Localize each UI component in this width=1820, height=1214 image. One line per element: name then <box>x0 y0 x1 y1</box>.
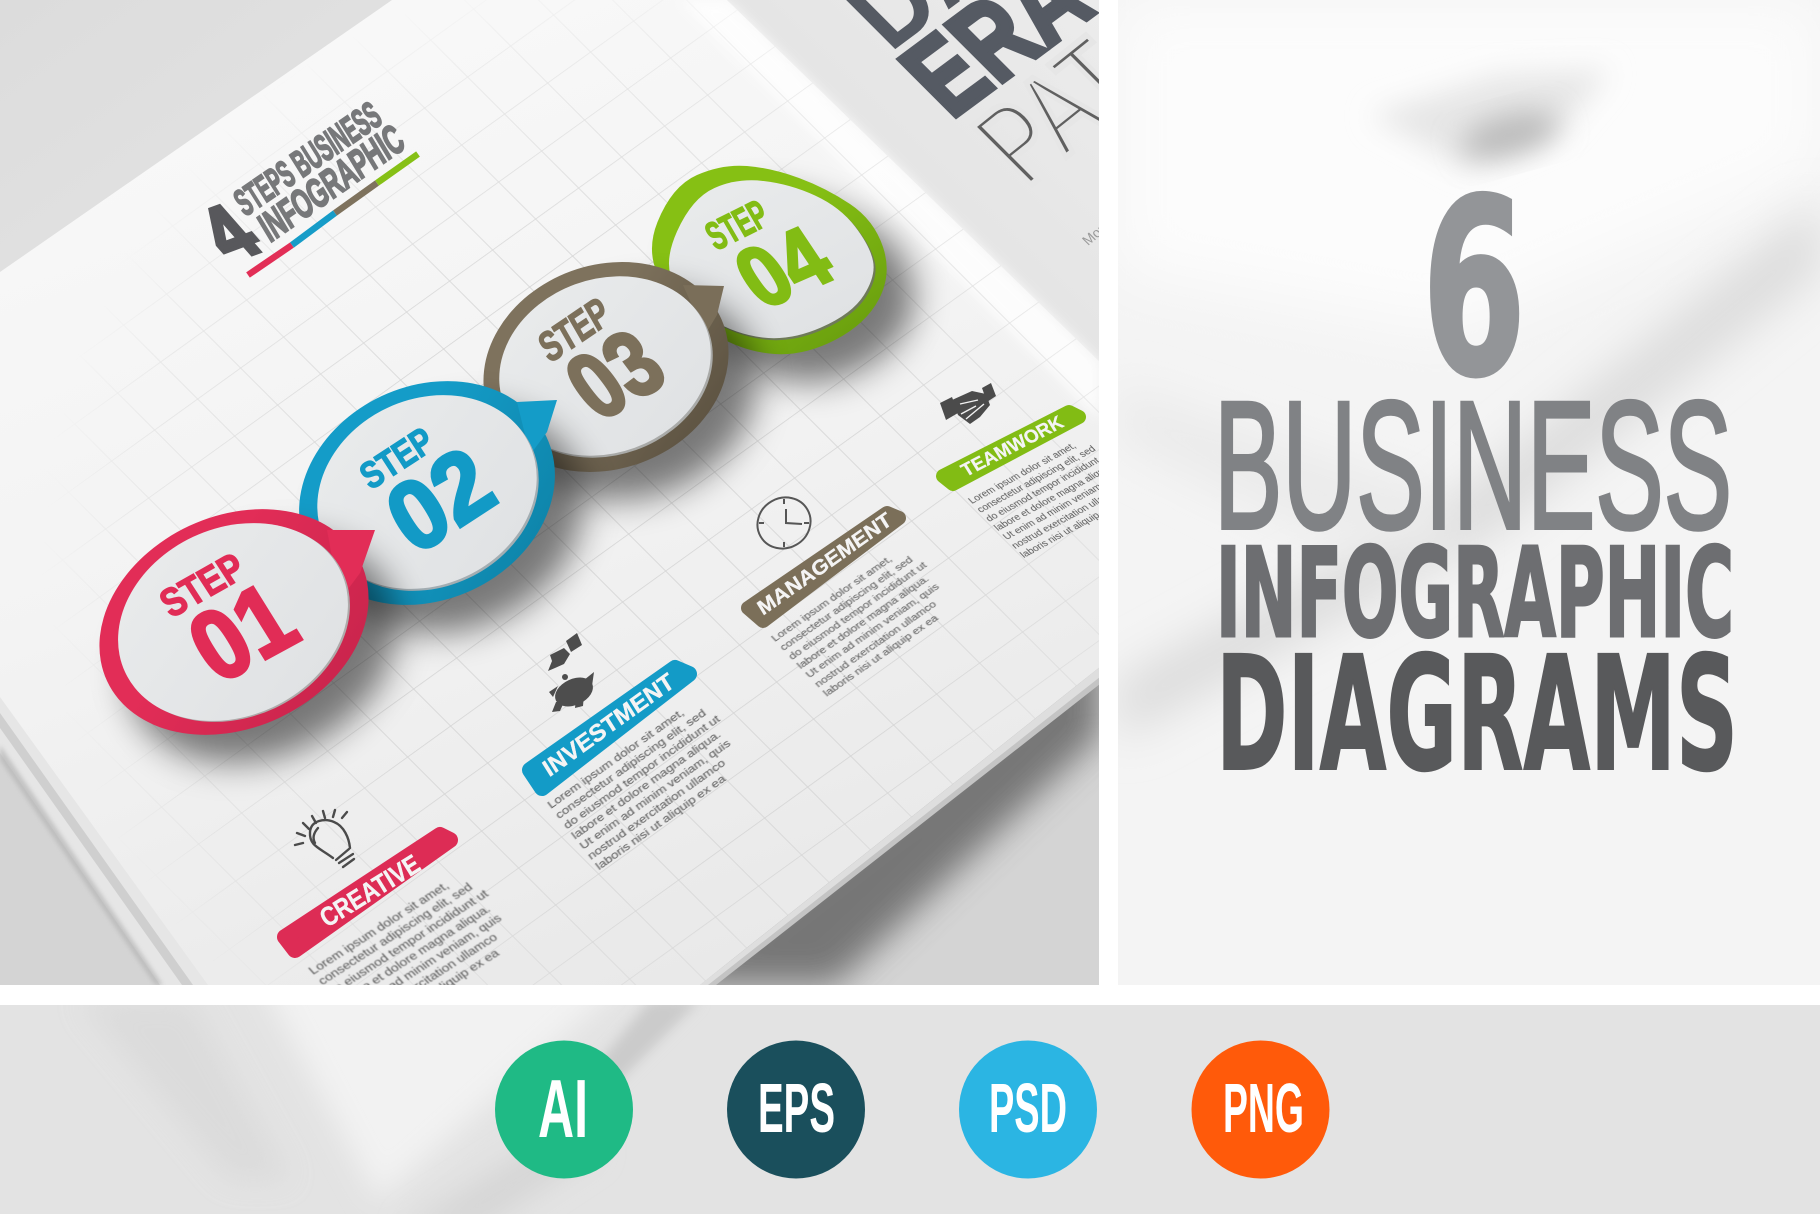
text block: teamwork: consectetur adipiscing elit, sed <box>975 444 1098 515</box>
text block: creative: Lorem ipsum dolor sit amet, <box>306 879 452 977</box>
text block: teamwork: Ut enim ad minim veniam, quis <box>1001 471 1125 542</box>
heading: 4 steps business infographic: STEPS BUSINESS <box>228 94 389 224</box>
icon: handshake <box>940 383 996 424</box>
heading: 4 steps business infographic <box>208 102 420 278</box>
badge: AI <box>495 1040 633 1178</box>
facing page with partial title: Mor <box>1079 221 1109 248</box>
text block: investment <box>546 708 731 870</box>
text block: management <box>770 556 940 697</box>
text block: teamwork: laboris nisi ut aliquip ex ea <box>1018 498 1126 560</box>
step 02 bubble <box>299 381 605 656</box>
text block: management: laboris nisi ut aliquip ex ea <box>821 612 941 699</box>
text block: management: Ut enim ad minim veniam, quis <box>804 581 942 681</box>
step 04 bubble: 04 <box>717 208 850 326</box>
text block: investment: nostrud exercitation ullamco <box>585 756 728 862</box>
step 04 bubble <box>652 166 915 382</box>
step 01 bubble: STEP <box>152 545 253 626</box>
text block: teamwork: Lorem ipsum dolor sit amet, <box>966 441 1079 506</box>
text block: teamwork: nostrud exercitation ullamco <box>1009 485 1123 551</box>
step 03 bubble: STEP <box>531 289 618 372</box>
icon: light bulb <box>295 810 354 867</box>
text block: management: nostrud exercitation ullamco <box>812 599 939 690</box>
panel: infographic book mockup <box>0 0 1099 985</box>
text block: management: Lorem ipsum dolor sit amet, <box>769 554 895 644</box>
badge: PNG <box>1192 1040 1330 1178</box>
text block: investment: Ut enim ad minim veniam, quis <box>577 737 733 852</box>
step 03 bubble: 03 <box>545 309 684 439</box>
text block: creative: labore et dolore magna aliqua. <box>334 903 493 1009</box>
text block: creative: laboris nisi ut aliquip ex ea <box>363 947 502 1040</box>
text block: investment: Lorem ipsum dolor sit amet, <box>545 706 686 811</box>
icon: hand and piggy bank <box>548 633 598 712</box>
text block: investment: labore et dolore magna aliqua. <box>569 728 723 842</box>
text block: investment: do eiusmod tempor incididunt ut <box>561 712 723 832</box>
text block: teamwork: do eiusmod tempor incididunt ut <box>984 451 1112 524</box>
badge: EPS: EPS <box>758 1069 835 1147</box>
text block: creative: Ut enim ad minim veniam, quis <box>344 912 504 1019</box>
text block: creative: nostrud exercitation ullamco <box>353 931 500 1030</box>
badge: PSD <box>959 1040 1097 1178</box>
facing page with partial title <box>728 0 1099 360</box>
text block: teamwork: labore et dolore magna aliqua. <box>992 463 1115 533</box>
step 02 bubble: STEP <box>352 419 441 497</box>
label: creative: CREATIVE <box>315 849 426 933</box>
step 03 bubble <box>483 262 778 524</box>
heading: 4 steps business infographic: INFOGRAPHIC <box>251 116 412 251</box>
step 01 bubble <box>99 509 418 786</box>
step 01 bubble: 01 <box>170 562 316 704</box>
badge: PNG: PNG <box>1223 1069 1304 1147</box>
label: investment: INVESTMENT <box>538 667 679 782</box>
step 02 bubble: 02 <box>369 427 512 575</box>
heading: 4 steps business infographic: 4 <box>178 189 279 276</box>
text block: investment: laboris nisi ut aliquip ex ea <box>593 772 728 872</box>
badge: AI: AI <box>538 1062 588 1155</box>
icon: clock <box>756 496 812 550</box>
facing page with partial title: PAT <box>950 16 1165 208</box>
badge: EPS <box>727 1040 865 1178</box>
label: teamwork: TEAMWORK <box>957 411 1068 480</box>
panel: file formats <box>0 1005 1820 1214</box>
text block: creative: do eiusmod tempor incididunt ut <box>325 887 492 998</box>
badge: PSD: PSD <box>989 1069 1067 1147</box>
text block: creative: consectetur adipiscing elit, sed <box>316 881 475 988</box>
label: creative <box>285 835 450 950</box>
text block: teamwork <box>968 444 1099 558</box>
text block: management: labore et dolore magna aliqua. <box>795 574 932 671</box>
heading: 6 business infographic diagrams <box>1221 190 1732 772</box>
text block: investment: consectetur adipiscing elit, sed <box>553 707 708 821</box>
step 04 bubble: STEP <box>698 192 776 259</box>
main page <box>0 0 1100 985</box>
heading: 6 business infographic diagrams: 6 <box>1422 148 1526 431</box>
label: management: MANAGEMENT <box>754 509 896 620</box>
text block: management: do eiusmod tempor incididunt ut <box>786 560 929 662</box>
panel: title <box>1118 0 1820 985</box>
text block: management: consectetur adipiscing elit, sed <box>778 555 916 653</box>
